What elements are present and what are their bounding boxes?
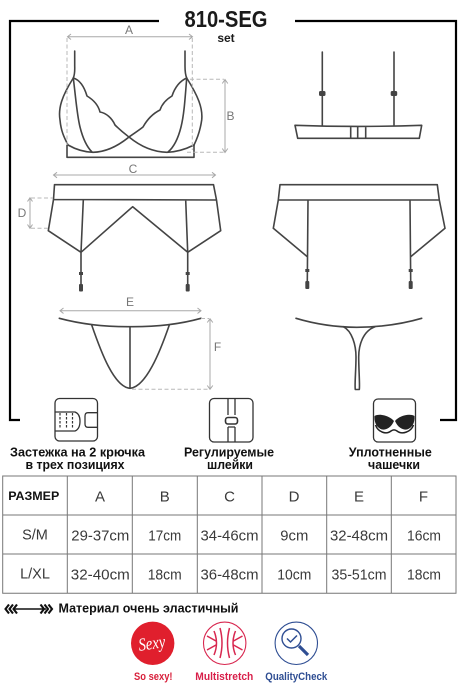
dimension A: A bbox=[125, 23, 133, 37]
dimension A bbox=[67, 23, 192, 150]
table header: C bbox=[224, 489, 235, 506]
table row L/XL: 18cm bbox=[407, 567, 441, 583]
table row S/M: 17cm bbox=[148, 529, 181, 545]
dimension B bbox=[187, 79, 235, 152]
table row S/M: 32-48cm bbox=[330, 529, 388, 545]
table header: A bbox=[95, 489, 105, 506]
table row L/XL: 10cm bbox=[277, 567, 311, 583]
icon: adjustable strap bbox=[210, 398, 253, 442]
dimension D bbox=[18, 198, 53, 228]
table row L/XL bbox=[20, 566, 441, 583]
badge: So sexy: Sexy bbox=[137, 631, 166, 655]
icon: elasticity double arrow bbox=[6, 604, 52, 614]
table row S/M: S/M bbox=[22, 528, 48, 544]
garter belt back drawing bbox=[273, 185, 445, 289]
icon: padded cups bbox=[374, 399, 416, 442]
table row L/XL: 36-48cm bbox=[200, 567, 258, 583]
table row S/M: 9cm bbox=[280, 529, 308, 545]
thong front drawing bbox=[59, 318, 201, 388]
dimension E: E bbox=[126, 295, 134, 309]
text: padded cups caption: чашечки bbox=[368, 457, 420, 472]
dimension C: C bbox=[129, 162, 138, 176]
frame around garment drawings bbox=[10, 21, 456, 420]
text: padded cups caption bbox=[349, 444, 432, 472]
table header: F bbox=[419, 489, 428, 506]
table row S/M: 29-37cm bbox=[71, 529, 129, 545]
title bbox=[184, 6, 268, 45]
badge: Multistretch: Multistretch bbox=[195, 671, 254, 683]
dimension B: B bbox=[226, 109, 235, 123]
thong back drawing bbox=[296, 318, 422, 390]
table row L/XL: 32-40cm bbox=[71, 567, 130, 583]
dimension D: D bbox=[18, 206, 27, 220]
table row S/M: 16cm bbox=[407, 529, 441, 545]
text: adjustable strap caption: шлейки bbox=[207, 457, 253, 472]
table row L/XL: 18cm bbox=[148, 567, 182, 583]
text: adjustable strap caption bbox=[184, 444, 274, 472]
bra back drawing bbox=[295, 52, 422, 138]
text: adjustable strap caption: Регулируемые bbox=[184, 444, 274, 460]
table row S/M: 34-46cm bbox=[200, 529, 258, 545]
text: hook closure caption: в трех позициях bbox=[26, 457, 125, 472]
text: hook closure caption bbox=[10, 444, 146, 472]
table header: РАЗМЕР bbox=[8, 489, 59, 503]
table header: D bbox=[289, 489, 300, 506]
badge: So sexy bbox=[131, 622, 174, 683]
size table bbox=[3, 476, 456, 593]
dimension E bbox=[60, 295, 201, 314]
text: hook closure caption: Застежка на 2 крючка bbox=[10, 444, 146, 460]
table row S/M bbox=[22, 528, 441, 545]
dimension F: F bbox=[214, 340, 221, 354]
bra front drawing bbox=[60, 51, 202, 157]
dimension C bbox=[54, 162, 216, 178]
icon: hook closure bbox=[55, 398, 98, 441]
title: 810-SEG bbox=[184, 6, 268, 32]
table row L/XL: L/XL bbox=[20, 566, 50, 582]
table header: B bbox=[160, 489, 170, 506]
text: material note: Материал очень эластичный bbox=[58, 600, 239, 615]
table header bbox=[8, 489, 428, 506]
badge: So sexy: So sexy! bbox=[134, 671, 173, 683]
badge: Multistretch bbox=[195, 622, 254, 683]
garter belt front drawing bbox=[48, 185, 221, 292]
text: padded cups caption: Уплотненные bbox=[349, 444, 432, 460]
table row L/XL: 35-51cm bbox=[332, 567, 386, 583]
badge: QualityCheck: QualityCheck bbox=[265, 671, 328, 683]
badge: QualityCheck bbox=[265, 622, 328, 683]
title: set bbox=[217, 31, 235, 45]
dimension F bbox=[132, 318, 221, 389]
table header: E bbox=[354, 489, 364, 506]
